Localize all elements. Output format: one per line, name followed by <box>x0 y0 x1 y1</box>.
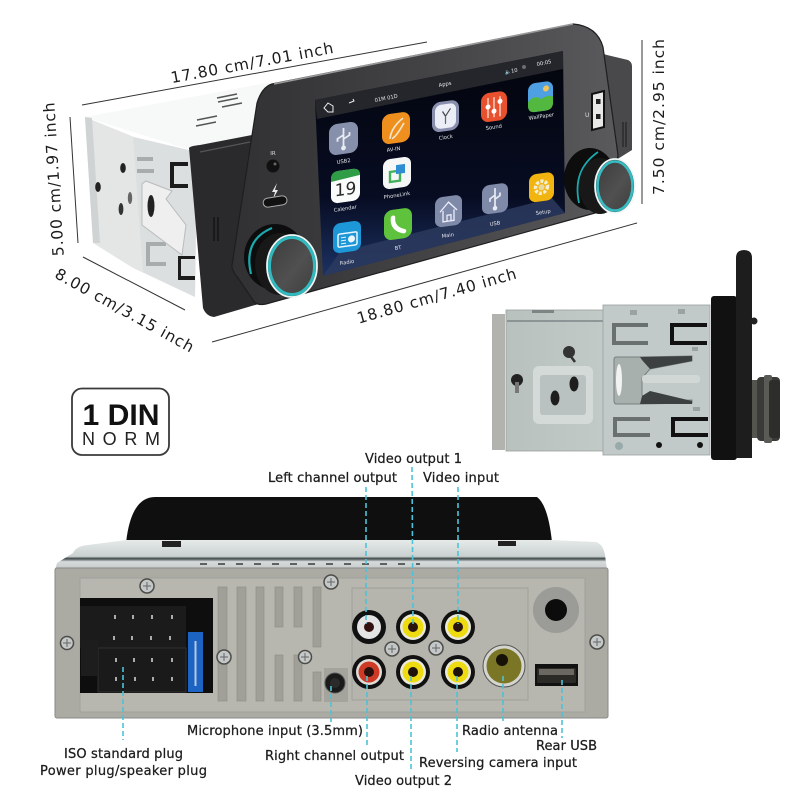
top metal strip <box>55 540 607 570</box>
app icon: USB2 <box>329 121 358 156</box>
label: Microphone input: Microphone input (3.5mm) <box>187 724 363 739</box>
app labels <box>333 112 555 267</box>
side knob <box>752 375 780 443</box>
app icon: Sound <box>481 90 507 123</box>
screws <box>60 575 604 664</box>
app icon: WallPaper <box>528 80 553 113</box>
rear plate <box>55 568 608 718</box>
antenna socket <box>483 645 525 687</box>
status bar text <box>324 59 552 112</box>
app icon: Radio <box>333 220 361 254</box>
app labels: PhoneLink <box>383 191 411 201</box>
dimension: right height 7.50 cm: 7.50 cm/2.95 inch <box>650 39 668 195</box>
app icon: USB <box>482 182 508 215</box>
black panel section <box>711 296 737 460</box>
product: side view <box>492 250 780 460</box>
dimension: top width 17.80 cm: 17.80 cm/7.01 inch <box>169 39 335 87</box>
rear edge <box>492 314 505 450</box>
label: Radio antenna: Radio antenna <box>462 724 558 739</box>
dimension: depth 8.00 cm: 8.00 cm/3.15 inch <box>52 265 197 356</box>
status bar text: Apps <box>438 81 452 89</box>
black screen back <box>126 497 552 543</box>
left knob <box>244 224 317 297</box>
label: Right channel output: Right channel output <box>265 749 404 764</box>
badge: 1 DIN norm: 1 DIN <box>82 399 160 432</box>
RCA connectors <box>352 610 475 689</box>
app icon: Main <box>435 194 462 228</box>
right knob <box>564 148 635 214</box>
label: Video output 2: Video output 2 <box>355 774 452 789</box>
black flange <box>736 250 752 458</box>
front panel <box>232 24 618 304</box>
app labels: AV-IN <box>386 146 401 154</box>
grommet <box>533 587 579 633</box>
rear USB port <box>535 664 578 686</box>
status bar <box>315 51 563 119</box>
right flange speaker slots <box>623 122 626 147</box>
app labels: USB2 <box>336 158 351 166</box>
ISO connector <box>80 598 213 693</box>
IR sensor: IR <box>270 151 276 157</box>
dimension: top width 17.80 cm <box>82 39 427 105</box>
app labels: WallPaper <box>528 112 555 122</box>
app icon: Calendar <box>331 168 360 204</box>
label: Reversing camera input: Reversing camera input <box>419 756 577 771</box>
app labels: USB <box>489 220 501 228</box>
app icon: Clock <box>432 99 459 133</box>
app labels: Clock <box>438 134 453 142</box>
product: car radio front view <box>85 24 635 317</box>
badge: 1 DIN norm: NORM <box>82 429 160 449</box>
badge: 1 DIN norm <box>72 388 169 455</box>
bottom dock <box>323 198 565 276</box>
callout lines <box>123 467 562 770</box>
app icon: Setup <box>529 171 554 203</box>
fuse <box>188 632 203 692</box>
app icon: AV-IN <box>382 111 410 145</box>
label: Rear USB: Rear USB <box>536 739 597 754</box>
app icon: PhoneLink <box>383 156 411 190</box>
app labels: BT <box>394 245 403 252</box>
app icon: BT <box>384 207 412 241</box>
dimension: front width 18.80 cm: 18.80 cm/7.40 inch <box>355 265 518 328</box>
front USB port <box>585 91 604 130</box>
product: rear view <box>55 497 608 718</box>
left side flange <box>189 135 262 317</box>
microphone jack <box>324 668 348 702</box>
screws on RCA panel <box>385 641 443 656</box>
app labels: Main <box>441 232 455 240</box>
dimension: front width 18.80 cm <box>212 223 637 342</box>
USB-C port with lightning icon <box>263 183 288 208</box>
label: Left channel output: Left channel output <box>268 471 397 486</box>
panel top rim highlight <box>274 24 573 84</box>
app labels: Sound <box>485 123 502 132</box>
right flange <box>600 53 632 170</box>
rear metal section <box>506 310 604 451</box>
metal chassis <box>85 82 272 297</box>
app labels: Calendar <box>333 204 358 214</box>
label: ISO standard plug: ISO standard plug <box>64 747 183 762</box>
RCA panel <box>352 588 528 700</box>
status bar text: 01M 01D <box>374 94 398 104</box>
IR sensor <box>266 151 280 172</box>
speaker slots <box>214 217 218 241</box>
screen <box>315 51 565 276</box>
front metal section <box>603 305 710 455</box>
heat sink ribs <box>218 587 321 701</box>
dimension: left height 5.00 cm: 5.00 cm/1.97 inch <box>40 102 68 257</box>
label: Video output 1: Video output 1 <box>365 452 462 467</box>
app icon: Calendar: 19 <box>335 179 356 201</box>
label: Video input: Video input <box>423 471 499 486</box>
status bar text: 🔈10 <box>504 68 518 76</box>
app labels: Setup <box>535 209 552 217</box>
embossed recess <box>533 366 593 424</box>
label: Power plug/speaker plug: Power plug/speaker plug <box>40 764 207 779</box>
status bar text: 00:05 <box>536 59 552 68</box>
front USB port: U <box>585 112 589 119</box>
app labels: Radio <box>339 259 355 267</box>
